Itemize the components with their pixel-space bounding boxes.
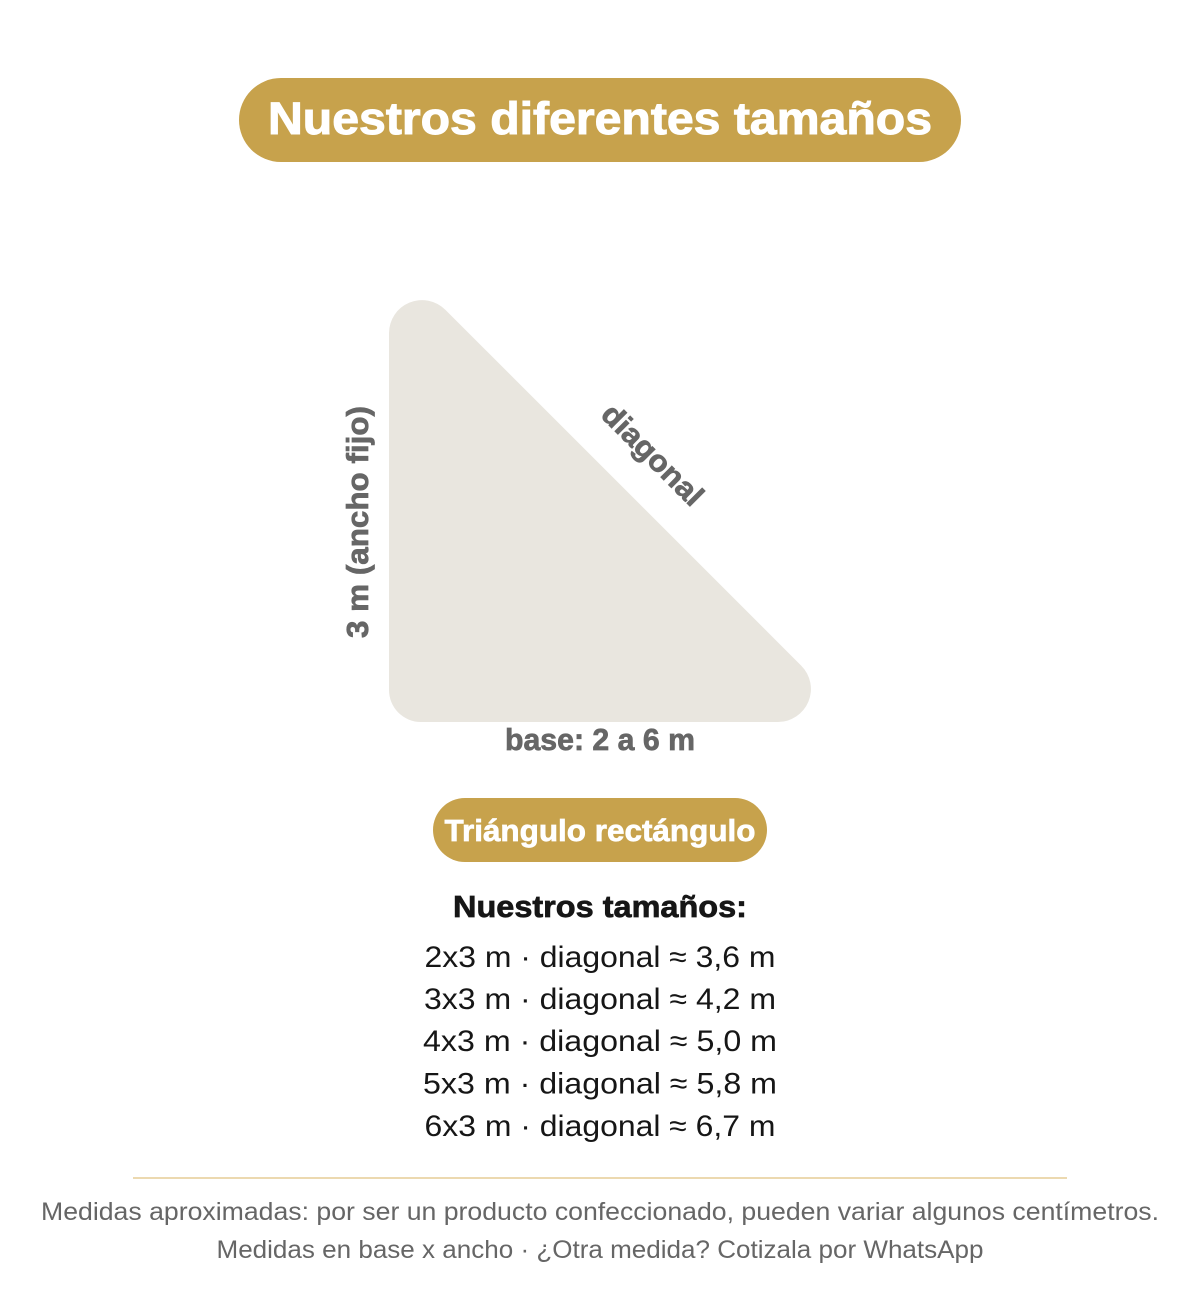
footnote line 2: Medidas en base x ancho · ¿Otra medida? Cotizala por WhatsApp (216, 1236, 984, 1264)
size row 6x3: 6x3 m · diagonal ≈ 6,7 m (424, 1110, 776, 1143)
label: base side: base: 2 a 6 m (505, 722, 695, 757)
title pill: Nuestros diferentes tamaños (268, 93, 932, 144)
sizes heading: Nuestros tamaños: (453, 889, 747, 924)
size row 5x3: 5x3 m · diagonal ≈ 5,8 m (423, 1068, 777, 1100)
label: diagonal side: diagonal (595, 398, 710, 513)
footnote line 1: Medidas aproximadas: por ser un producto confeccionado, pueden variar algunos centímetros. (41, 1198, 1159, 1226)
triangle shape (389, 300, 811, 722)
size row 4x3: 4x3 m · diagonal ≈ 5,0 m (423, 1025, 777, 1058)
footnote (41, 1198, 1159, 1264)
title pill (239, 78, 961, 162)
label: height side: 3 m (ancho fijo) (340, 406, 375, 638)
sizes list (423, 889, 777, 1143)
size row 3x3: 3x3 m · diagonal ≈ 4,2 m (424, 983, 776, 1016)
shape name pill (433, 798, 767, 862)
shape name pill: Triángulo rectángulo (444, 813, 756, 848)
size row 2x3: 2x3 m · diagonal ≈ 3,6 m (424, 941, 776, 974)
